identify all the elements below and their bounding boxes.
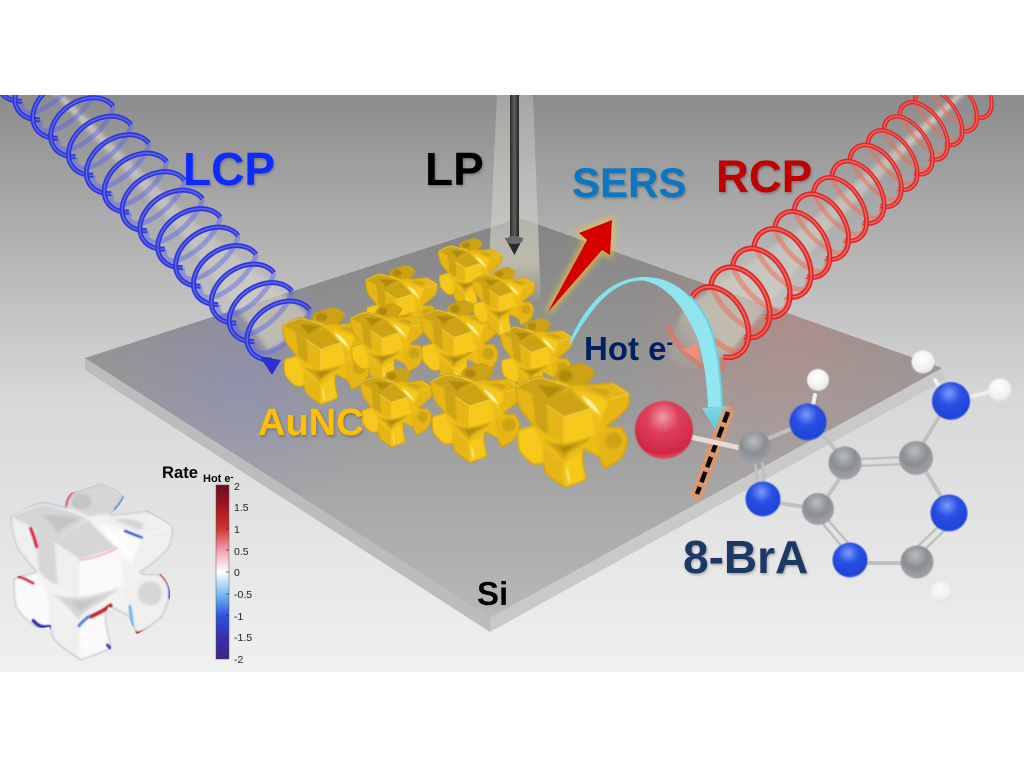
LCP blue helix beam [0,95,312,362]
LCP arrow head [260,357,281,375]
colour bar tick labels [234,481,252,666]
hot e- label: - [230,472,234,482]
RCP red helix beam [666,95,994,373]
label: Si: Si [477,575,508,612]
cleavage dashed line [697,412,728,494]
bromine atom [635,401,693,459]
colour bar tick labels: -0.5 [234,589,252,601]
colour bar tick labels: 0.5 [234,546,249,558]
label: 8-BrA: 8-BrA [683,531,808,583]
LP black arrow [505,95,523,255]
colour bar tick labels: -2 [234,654,243,666]
hydrogen atoms [807,350,1012,602]
silicon substrate plate [85,218,945,632]
label: AuNC: AuNC [258,402,364,444]
carbon and nitrogen atoms [738,382,970,578]
background panel [0,95,1024,672]
colour bar tick labels: 2 [234,481,240,493]
gold nanocube array [280,237,632,490]
inset: silver nanocube with hot electron rate map [7,463,252,666]
label: LP: LP [425,143,484,195]
rate label: Rate [162,463,198,482]
RCP arrow head [682,343,700,361]
label: RCP: RCP [716,151,812,202]
label: SERS: SERS [572,159,686,206]
colour bar [216,485,229,659]
colour bar tick labels: 0 [234,567,240,579]
hot electron cyan arc arrow [569,277,730,433]
label: Hot e-: - [666,332,673,354]
SERS red arrow [548,220,612,312]
silver nanocube with hot spot colours [7,480,177,663]
label: LCP: LCP [183,143,275,195]
colour bar tick labels: -1.5 [234,632,252,644]
label: Hot e-: Hot e [584,330,666,367]
molecule bonds [690,380,990,586]
colour bar tick labels: 1.5 [234,502,249,514]
hot e- label: Hot e [203,473,230,485]
colour bar tick labels: 1 [234,524,240,536]
LP beam cone [487,95,541,305]
8-BrA molecule [635,350,1012,602]
colour bar tick labels: -1 [234,611,243,623]
